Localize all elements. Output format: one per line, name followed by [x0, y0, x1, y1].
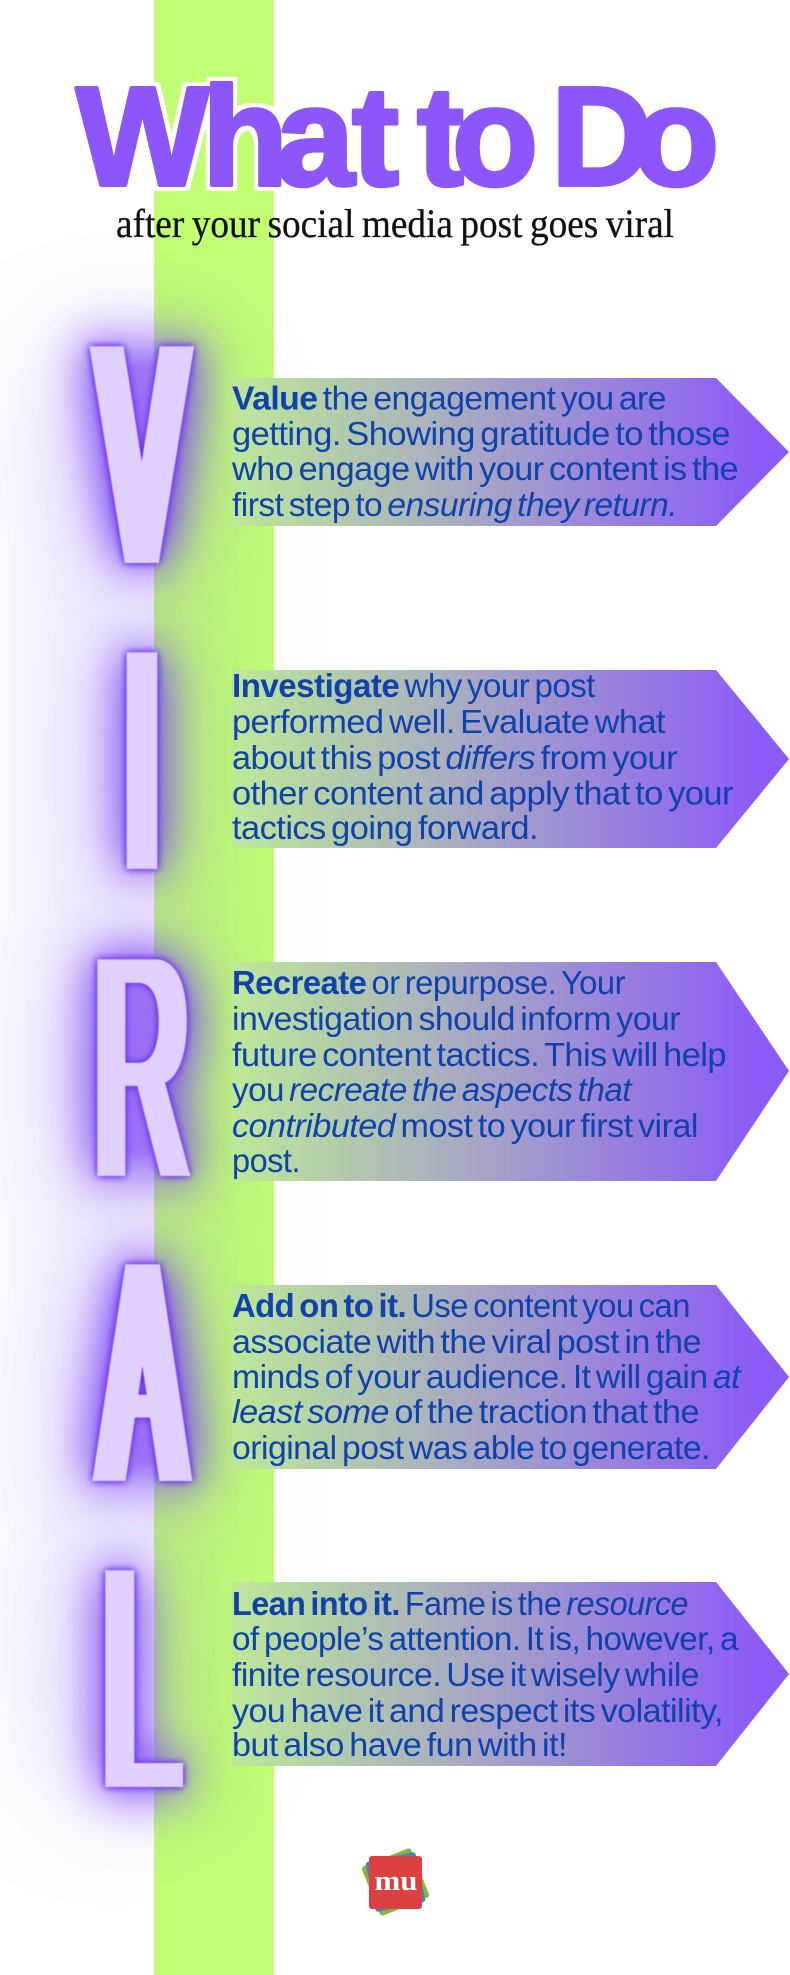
panel text: other content and apply that to your: [232, 774, 734, 812]
panel: Investigate: [232, 667, 789, 848]
logo blue card: [365, 1852, 426, 1912]
glowing VIRAL letters: [95, 278, 188, 1854]
panel text: associate with the viral post in the: [232, 1323, 701, 1360]
arrow shape: [232, 1582, 789, 1766]
logo green card: [361, 1848, 430, 1916]
logo wordmark: mu: [374, 1866, 418, 1897]
logo red card: [369, 1856, 422, 1909]
soft lavender halo: [40, 360, 190, 1780]
panel text: but also have fun with it!: [232, 1726, 567, 1763]
panel text: first step to ensuring they return.: [232, 486, 677, 523]
panel text: [231, 380, 738, 523]
panel: Value: [231, 378, 789, 526]
green vertical band: [154, 0, 274, 1975]
title: What to Do: [76, 57, 719, 215]
arrow shape: [232, 1285, 789, 1469]
panel text: future content tactics. This will help: [232, 1036, 726, 1073]
panel text: Recreate or repurpose. Your: [232, 964, 625, 1001]
letter R: R: [95, 892, 188, 1244]
panel text: Value the engagement you are: [232, 380, 666, 416]
letter L: L: [102, 1501, 180, 1854]
panel text: Investigate why your post: [232, 667, 595, 704]
panel text: [232, 964, 726, 1179]
panel text: finite resource. Use it wisely while: [232, 1656, 699, 1693]
arrow shape: [232, 378, 789, 526]
panel text: about this post differs from your: [232, 739, 678, 776]
panel text: Add on to it. Use content you can: [232, 1287, 690, 1324]
panel text: minds of your audience. It will gain at: [232, 1358, 742, 1395]
letter A: A: [103, 1198, 182, 1549]
panel text: getting. Showing gratitude to those: [232, 415, 730, 452]
panel: Lean into it: [232, 1582, 789, 1766]
panel text: [232, 1585, 739, 1763]
panel text: contributed most to your first viral: [232, 1107, 698, 1144]
panel text: you have it and respect its volatility,: [232, 1692, 723, 1729]
panel text: original post was able to generate.: [232, 1429, 710, 1466]
logo: mu: [361, 1848, 430, 1916]
panel text: investigation should inform your: [232, 1000, 681, 1037]
panel text: of people’s attention. It is, however, a: [232, 1620, 739, 1657]
panel: Recreate: [232, 962, 789, 1181]
panel: Add on to it: [232, 1285, 789, 1469]
panel text: tactics going forward.: [232, 809, 538, 846]
arrow shape: [232, 670, 789, 848]
panel text: Lean into it. Fame is the resource: [232, 1585, 688, 1622]
panel text: post.: [232, 1142, 300, 1179]
panel text: [232, 667, 734, 846]
panel text: who engage with your content is the: [231, 450, 738, 487]
panel text: you recreate the aspects that: [232, 1071, 633, 1108]
subtitle: after your social media post goes viral: [116, 201, 674, 246]
panel text: performed well. Evaluate what: [232, 703, 665, 740]
letter I: I: [120, 583, 164, 936]
panel text: [232, 1287, 742, 1466]
arrow shape: [232, 962, 789, 1181]
letter V: V: [100, 278, 184, 630]
panel text: least some of the traction that the: [232, 1393, 699, 1430]
